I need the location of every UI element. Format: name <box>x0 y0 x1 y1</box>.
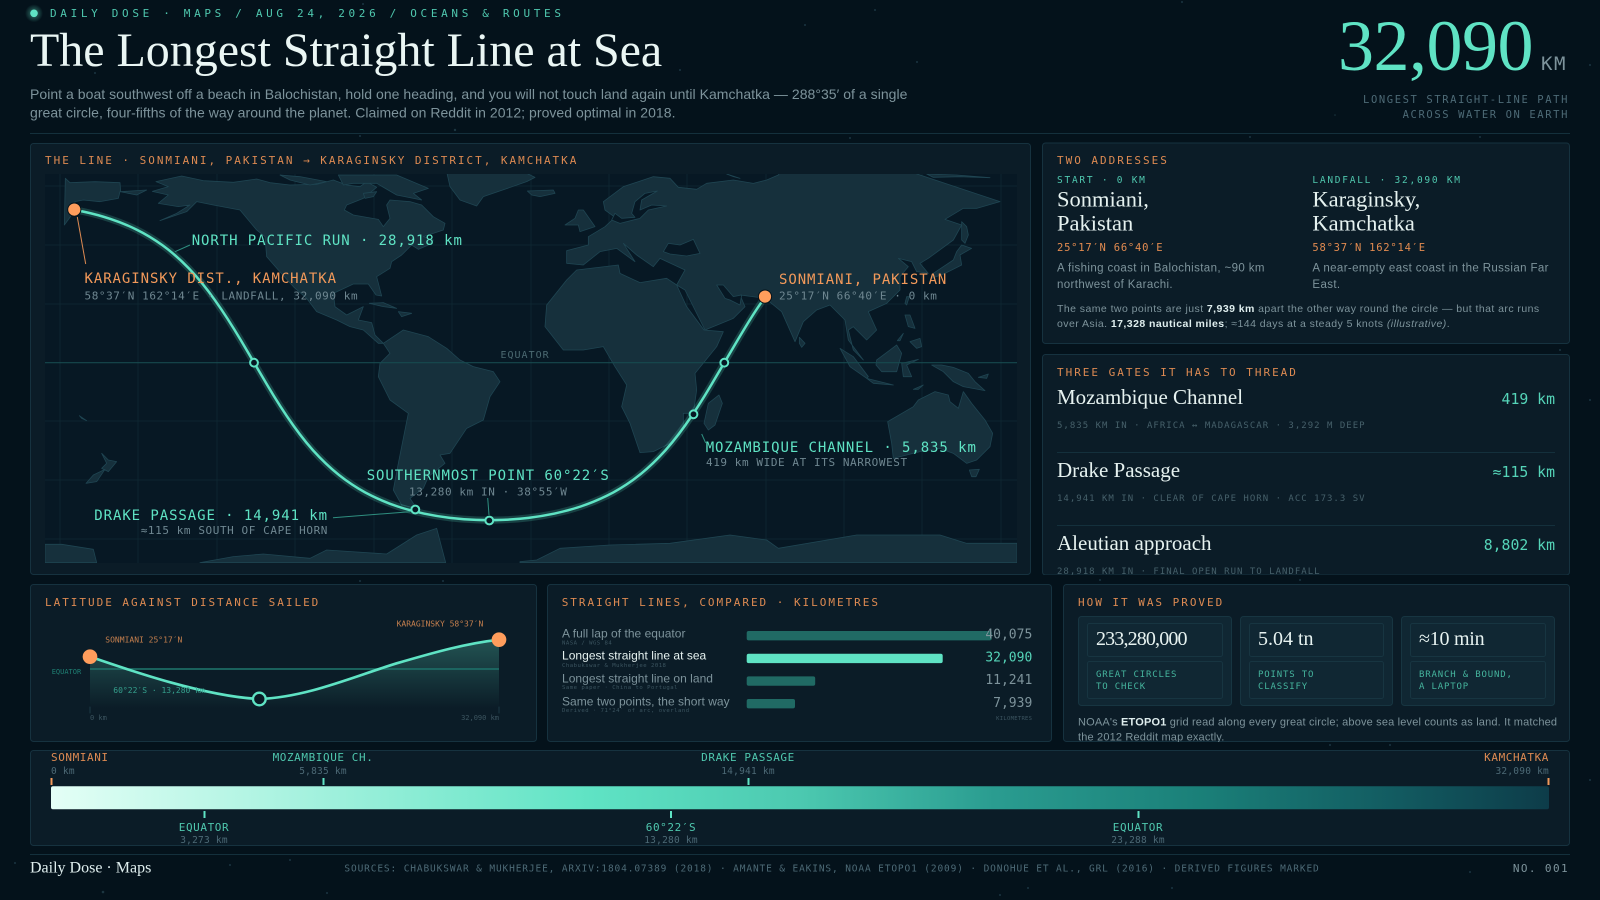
strip label: 60°22′S: 60°22′S <box>646 821 696 834</box>
strip label: equator south <box>179 821 229 846</box>
chart labels: KARAGINSKY 58°37′N <box>397 620 483 629</box>
label: southernmost point: 13,280 km IN · 38°55′W <box>409 485 567 498</box>
label: southernmost point <box>367 468 610 498</box>
header eyebrow: DAILY DOSE · MAPS / AUG 24, 2026 / OCEANS & ROUTES <box>50 7 565 20</box>
chart labels: 60°22′S · 13,280 km <box>113 686 205 695</box>
strip label: Kamchatka: 32,090 km <box>1495 766 1549 777</box>
bar row: short way <box>562 694 1032 714</box>
strip label: Mozambique: MOZAMBIQUE CH. <box>273 751 373 764</box>
landfall address: A near-empty east coast in the Russian Far <box>1312 262 1549 274</box>
strip label: equator north <box>1111 821 1165 846</box>
marker: Sonmiani <box>758 290 772 303</box>
intro paragraph: Point a boat southwest off a beach in Balochistan, hold one heading, and you will not touch land again until Kamchatka — 288°35′ of a single <box>30 86 908 102</box>
landfall address: Kamchatka <box>1312 210 1415 235</box>
gate: Mozambique <box>1058 389 1554 429</box>
leader lines <box>77 217 706 518</box>
route nodes <box>250 359 728 524</box>
footer issue number: NO. 001 <box>1513 862 1569 875</box>
note <box>1057 303 1540 330</box>
big number: KM <box>1541 53 1567 75</box>
panel: how it was proved <box>1064 584 1570 743</box>
bar row: equator: NASA / WGS 84 <box>562 640 612 646</box>
strip label: Kamchatka <box>1484 751 1549 777</box>
gate: Aleutian: 8,802 km <box>1484 537 1555 554</box>
stat card: points: CLASSIFY <box>1258 682 1308 692</box>
bar row: land <box>562 672 1032 691</box>
gate: Mozambique: 419 km <box>1502 391 1555 408</box>
method note <box>1078 717 1557 743</box>
map heading: THE LINE · SONMIANI, PAKISTAN → KARAGINSKY DISTRICT, KAMCHATKA <box>45 154 578 167</box>
start address: Sonmiani, <box>1057 187 1149 212</box>
panel: latitude chart <box>30 584 536 742</box>
panel: three gates <box>1042 354 1570 577</box>
strip label: equator north: EQUATOR <box>1113 821 1163 834</box>
start address: northwest of Karachi. <box>1057 279 1173 291</box>
landfall address <box>1312 175 1549 291</box>
bar row: sea <box>562 648 1032 669</box>
start address: Pakistan <box>1057 210 1133 235</box>
big number: ACROSS WATER ON EARTH <box>1403 109 1569 121</box>
gradient bar <box>51 786 1549 809</box>
stat card: time: BRANCH & BOUND, <box>1419 670 1513 680</box>
strip label: 60°22′S: 13,280 km <box>644 835 698 846</box>
start address: 25°17′N 66°40′E <box>1057 242 1163 254</box>
bar row: sea: Chabukswar & Mukherjee 2018 <box>562 663 667 669</box>
chart labels: SONMIANI 25°17′N <box>105 636 183 645</box>
stat card: points <box>1240 616 1392 706</box>
stat card: great circles: 233,280,000 <box>1096 628 1188 650</box>
label: Sonmiani: 25°17′N 66°40′E · 0 km <box>779 289 937 302</box>
title: The Longest Straight Line at Sea <box>30 24 662 77</box>
stat card: great circles: TO CHECK <box>1096 682 1146 692</box>
gate: Mozambique: 5,835 KM IN · AFRICA ↔ MADAGASCAR · 3,292 M DEEP <box>1057 421 1366 431</box>
strip label: Drake: DRAKE PASSAGE <box>701 751 795 764</box>
bar row: short way: Derived · 71°24′ of arc, overland <box>562 708 690 714</box>
gate: Mozambique: Mozambique Channel <box>1057 385 1243 409</box>
label: Drake Passage <box>94 508 328 537</box>
bar row: equator: 40,075 <box>985 628 1032 642</box>
landfall address: 58°37′N 162°14′E <box>1312 242 1426 254</box>
strip label: Mozambique: 5,835 km <box>299 766 347 777</box>
stat card: time <box>1402 616 1554 706</box>
start address: START · 0 KM <box>1057 175 1147 186</box>
bar row: equator <box>562 626 1032 646</box>
gate: Drake: 14,941 KM IN · CLEAR OF CAPE HORN · ACC 173.3 SV <box>1057 494 1366 504</box>
start address: A fishing coast in Balochistan, ~90 km <box>1057 262 1265 274</box>
panel: map <box>30 144 1030 574</box>
gate: Aleutian: Aleutian approach <box>1057 531 1212 555</box>
gate: Drake <box>1058 462 1554 502</box>
stat card: time: A LAPTOP <box>1419 682 1469 692</box>
stat card: time: ≈10 min <box>1419 628 1485 650</box>
start address <box>1057 175 1265 291</box>
heading: LATITUDE AGAINST DISTANCE SAILED <box>45 596 320 609</box>
strip label: equator south: EQUATOR <box>179 821 229 834</box>
header eyebrow <box>25 4 565 22</box>
label: southernmost point: SOUTHERNMOST POINT 60°22′S <box>367 468 610 484</box>
label: Drake Passage: DRAKE PASSAGE · 14,941 km <box>94 508 328 524</box>
equator label: EQUATOR <box>500 350 550 361</box>
bar row: short way: Same two points, the short way <box>562 694 730 708</box>
big number: LONGEST STRAIGHT-LINE PATH <box>1363 94 1569 106</box>
strip label: Kamchatka: KAMCHATKA <box>1484 751 1549 764</box>
intro paragraph: great circle, four-fifths of the way around the planet. Claimed on Reddit in 2012; proved optimal in 2018. <box>30 104 676 120</box>
intro paragraph <box>30 86 908 120</box>
big number <box>1338 6 1569 121</box>
gate: Drake: Drake Passage <box>1057 458 1180 482</box>
method note: the 2012 Reddit map exactly. <box>1078 731 1224 743</box>
note: over Asia. 17,328 nautical miles; ≈144 days at a steady 5 knots (illustrative). <box>1057 318 1450 330</box>
label: Mozambique Channel: 419 km WIDE AT ITS NARROWEST <box>706 456 908 469</box>
gate: Drake: ≈115 km <box>1493 464 1555 481</box>
strip label: Mozambique <box>273 751 373 777</box>
footer brand: Daily Dose · Maps <box>30 860 151 876</box>
bar row: short way: 7,939 <box>993 696 1032 711</box>
landfall address: Karaginsky, <box>1312 187 1420 212</box>
panel: two addresses <box>1042 143 1570 344</box>
stat card: great circles: GREAT CIRCLES <box>1096 670 1177 680</box>
ticks <box>50 778 1550 818</box>
latitude curve <box>83 632 506 713</box>
bar row: land: Same paper · China to Portugal <box>562 685 678 691</box>
strip label: Sonmiani: 0 km <box>51 766 75 777</box>
stat card: points: 5.04 tn <box>1258 628 1314 650</box>
gate: Aleutian: 28,918 KM IN · FINAL OPEN RUN TO LANDFALL <box>1057 567 1321 577</box>
heading: THREE GATES IT HAS TO THREAD <box>1057 366 1298 379</box>
bar row: equator: A full lap of the equator <box>562 626 686 640</box>
note: The same two points are just 7,939 km apart the other way round the circle — but that arc runs <box>1057 303 1540 315</box>
label: Karaginsky <box>84 271 358 302</box>
strip label: Drake: 14,941 km <box>721 766 775 777</box>
bar row: land: 11,241 <box>985 673 1032 688</box>
route: great circle <box>74 210 765 520</box>
method note: NOAA's ETOPO1 grid read along every great circle; above sea level counts as land. It matched <box>1078 717 1557 729</box>
axis unit: KILOMETRES <box>996 716 1032 722</box>
strip label: equator north: 23,288 km <box>1111 835 1165 846</box>
chart labels <box>52 620 499 722</box>
stat card: great circles <box>1078 616 1232 706</box>
label: Sonmiani <box>779 272 947 302</box>
world map <box>45 172 1017 563</box>
bar row: sea: Longest straight line at sea <box>562 648 707 662</box>
label: Sonmiani: SONMIANI, PAKISTAN <box>779 272 947 288</box>
heading: TWO ADDRESSES <box>1057 154 1169 167</box>
chart labels: EQUATOR <box>52 668 82 676</box>
label: North Pacific run: NORTH PACIFIC RUN · 28,918 km <box>192 233 463 249</box>
big number: 32,090 <box>1338 6 1533 86</box>
panel: straight lines compared <box>548 584 1052 742</box>
strip label: Sonmiani: SONMIANI <box>51 751 109 764</box>
strip label: equator south: 3,273 km <box>180 835 228 846</box>
strip label: Sonmiani <box>51 751 109 777</box>
label: Karaginsky: KARAGINSKY DIST., KAMCHATKA <box>84 271 337 287</box>
label: Mozambique Channel <box>706 440 977 469</box>
bar row: land: Longest straight line on land <box>562 672 713 686</box>
heading: STRAIGHT LINES, COMPARED · KILOMETRES <box>562 596 880 609</box>
landfall address: LANDFALL · 32,090 KM <box>1312 175 1462 186</box>
chart labels: 0 km <box>90 714 107 722</box>
gate: Aleutian <box>1057 535 1554 575</box>
panel: distance strip <box>30 750 1570 846</box>
heading: HOW IT WAS PROVED <box>1078 596 1224 609</box>
marker: Karaginsky <box>68 203 81 216</box>
stat card: points: POINTS TO <box>1258 670 1314 680</box>
label: Drake Passage: ≈115 km SOUTH OF CAPE HORN <box>141 524 328 537</box>
label: Mozambique Channel: MOZAMBIQUE CHANNEL · 5,835 km <box>706 440 977 456</box>
label: Karaginsky: 58°37′N 162°14′E · LANDFALL, 32,090 km <box>84 289 358 302</box>
strip label: Drake <box>701 751 795 777</box>
bar row: sea: 32,090 <box>985 650 1032 666</box>
landfall address: East. <box>1312 279 1341 291</box>
chart labels: 32,090 km <box>461 714 499 722</box>
strip label: 60°22′S <box>644 821 698 846</box>
footer sources: SOURCES: CHABUKSWAR & MUKHERJEE, ARXIV:1804.07389 (2018) · AMANTE & EAKINS, NOAA ETOPO1 (2009) · DONOHUE ET AL., GRL (2016) · DERIVED FIGURES MARKED <box>344 864 1320 874</box>
